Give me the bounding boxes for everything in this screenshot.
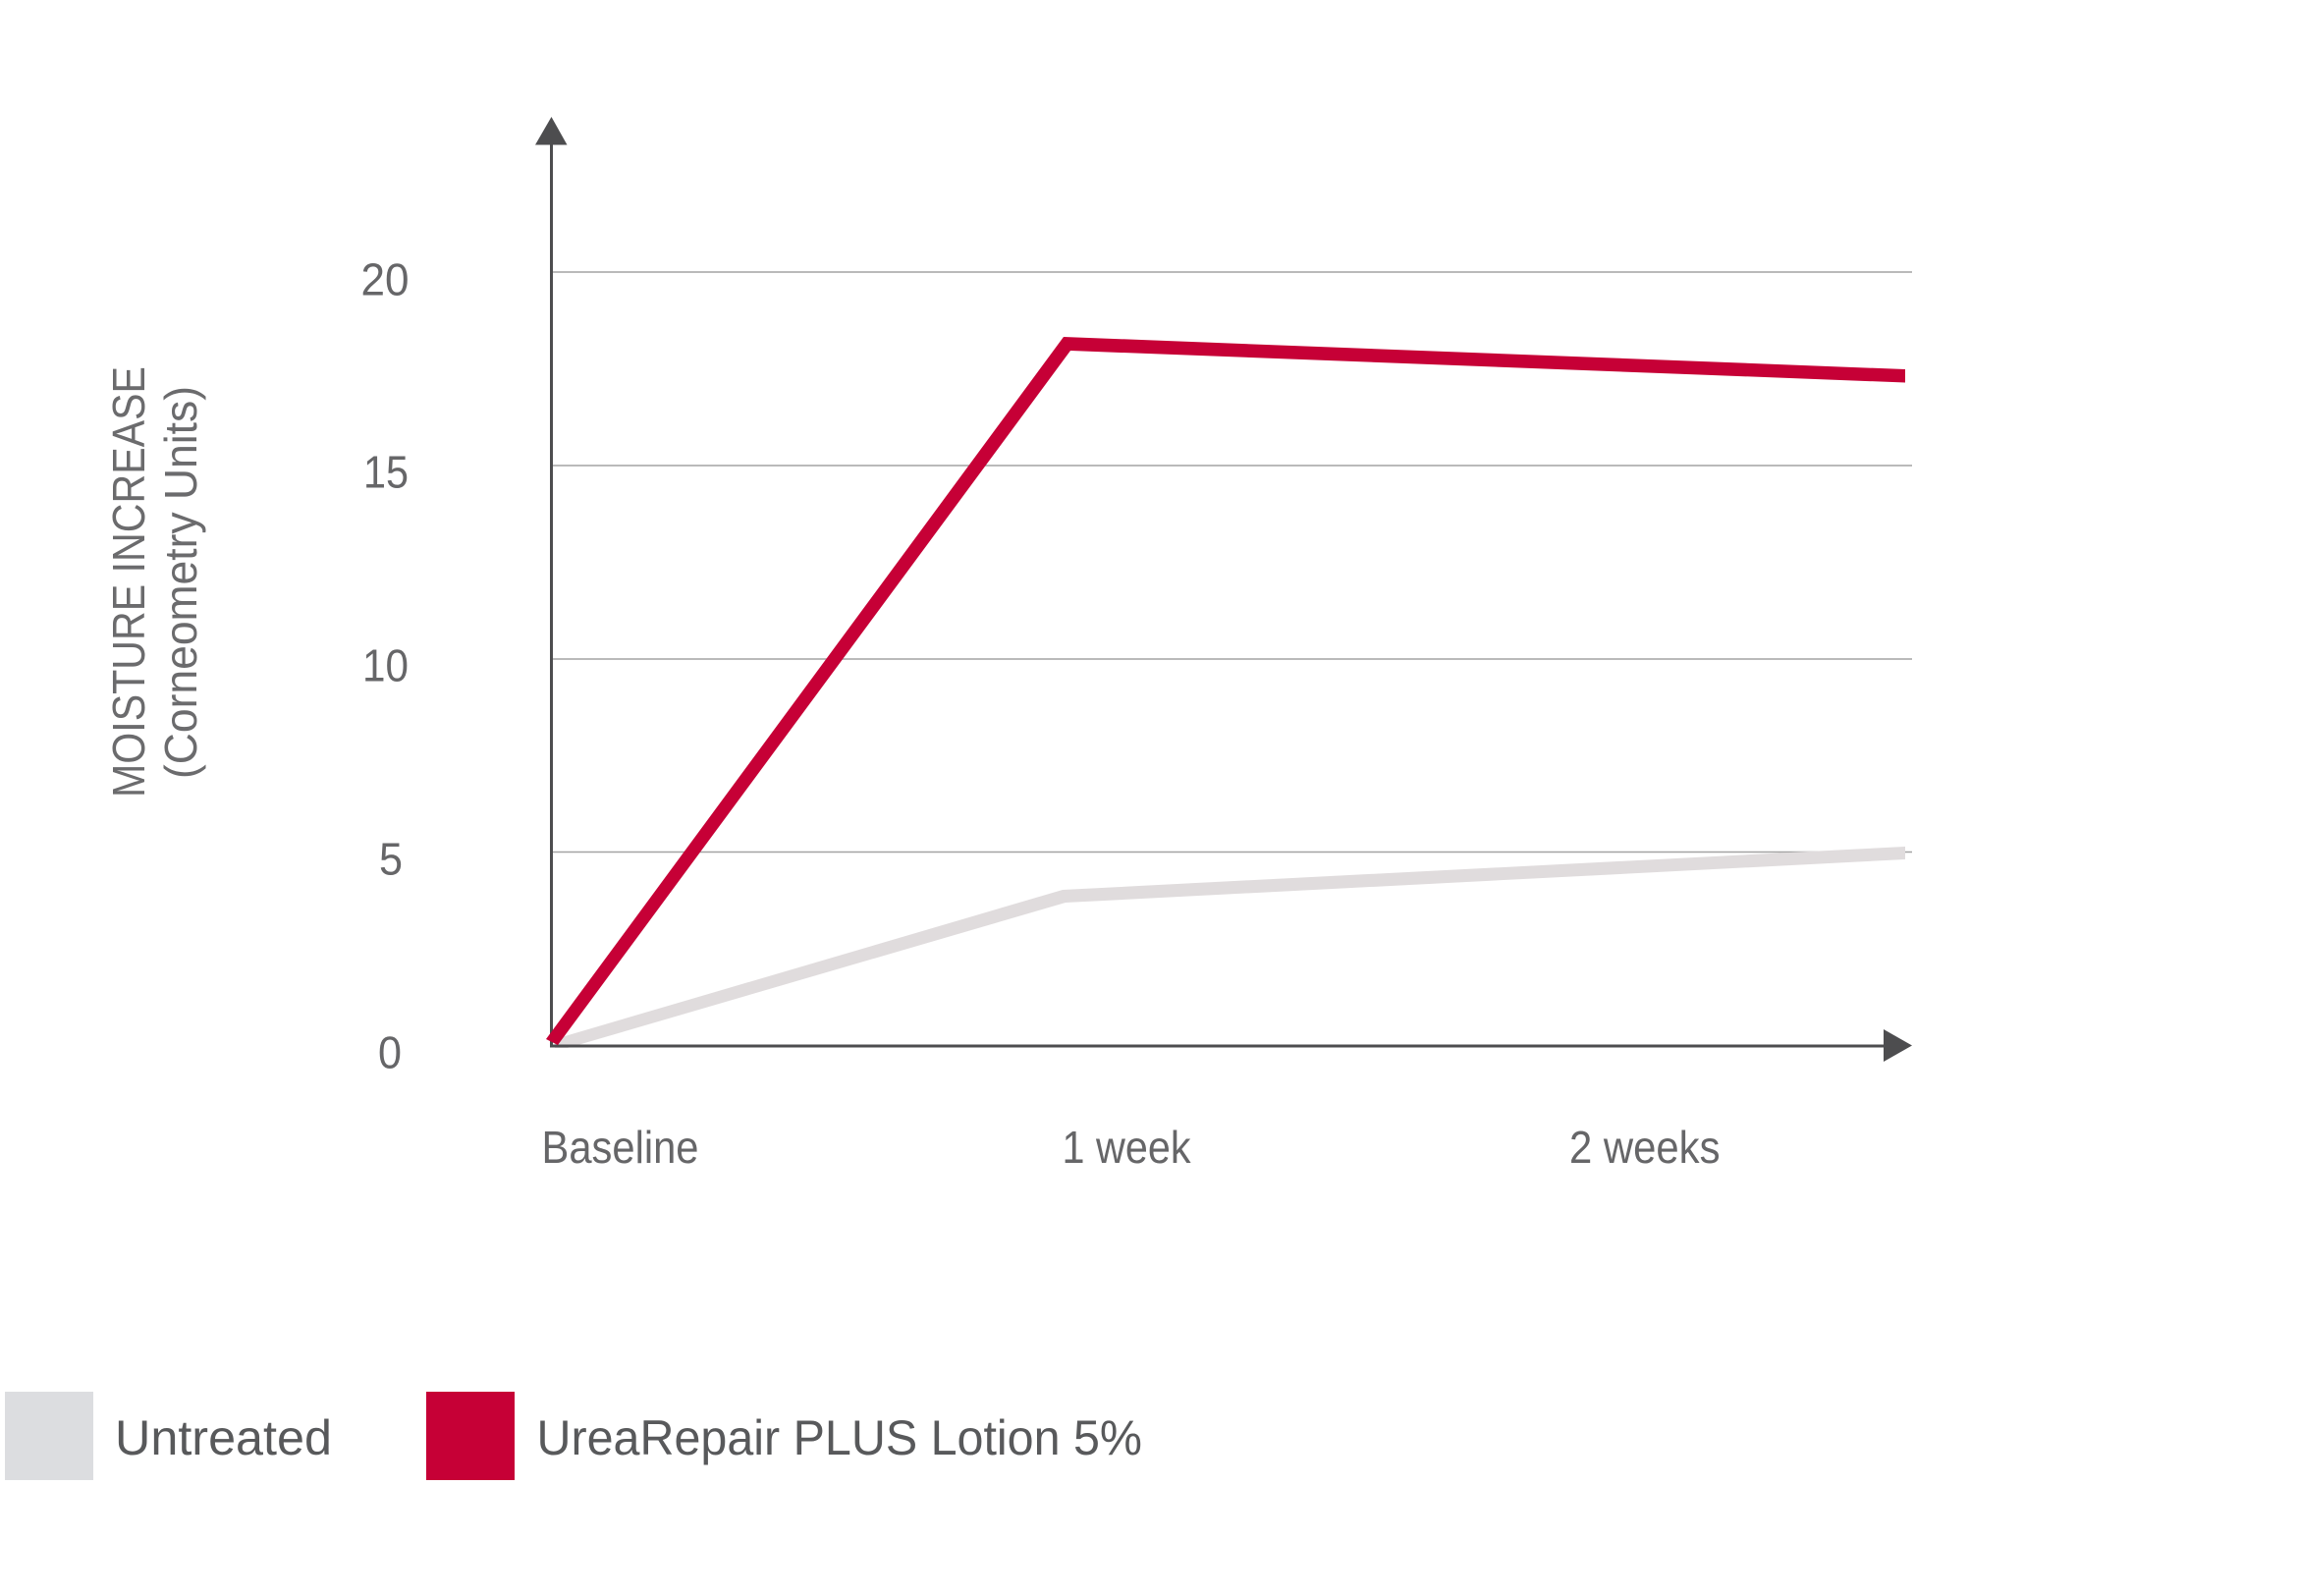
y axis title [103, 366, 206, 798]
y axis tick labels: 20 [361, 253, 409, 304]
legend: untreated: Untreated [115, 1410, 332, 1465]
x axis labels: 1 week [1063, 1122, 1191, 1173]
y axis tick labels: 15 [363, 446, 409, 497]
y axis title: (Corneometry Units) [155, 386, 206, 779]
x axis labels: Baseline [542, 1122, 699, 1173]
legend: untreated [5, 1392, 332, 1480]
y axis tick labels: 0 [378, 1027, 402, 1078]
x axis with arrow [550, 1029, 1912, 1062]
series line: UreaRepair PLUS Lotion 5% [546, 337, 1905, 1045]
legend: UreaRepair PLUS Lotion 5% [426, 1392, 1142, 1480]
y axis with arrow [535, 117, 568, 1047]
legend: UreaRepair PLUS Lotion 5%: UreaRepair PLUS Lotion 5% [536, 1410, 1142, 1465]
series line: untreated [555, 847, 1905, 1048]
y axis title: MOISTURE INCREASE [103, 366, 154, 798]
x axis labels: 2 weeks [1569, 1122, 1721, 1173]
y axis tick labels: 5 [379, 833, 403, 884]
y axis tick labels: 10 [362, 640, 409, 691]
horizontal grid lines [551, 272, 1912, 853]
x axis labels [542, 1122, 1721, 1173]
y axis tick labels [361, 253, 409, 1078]
